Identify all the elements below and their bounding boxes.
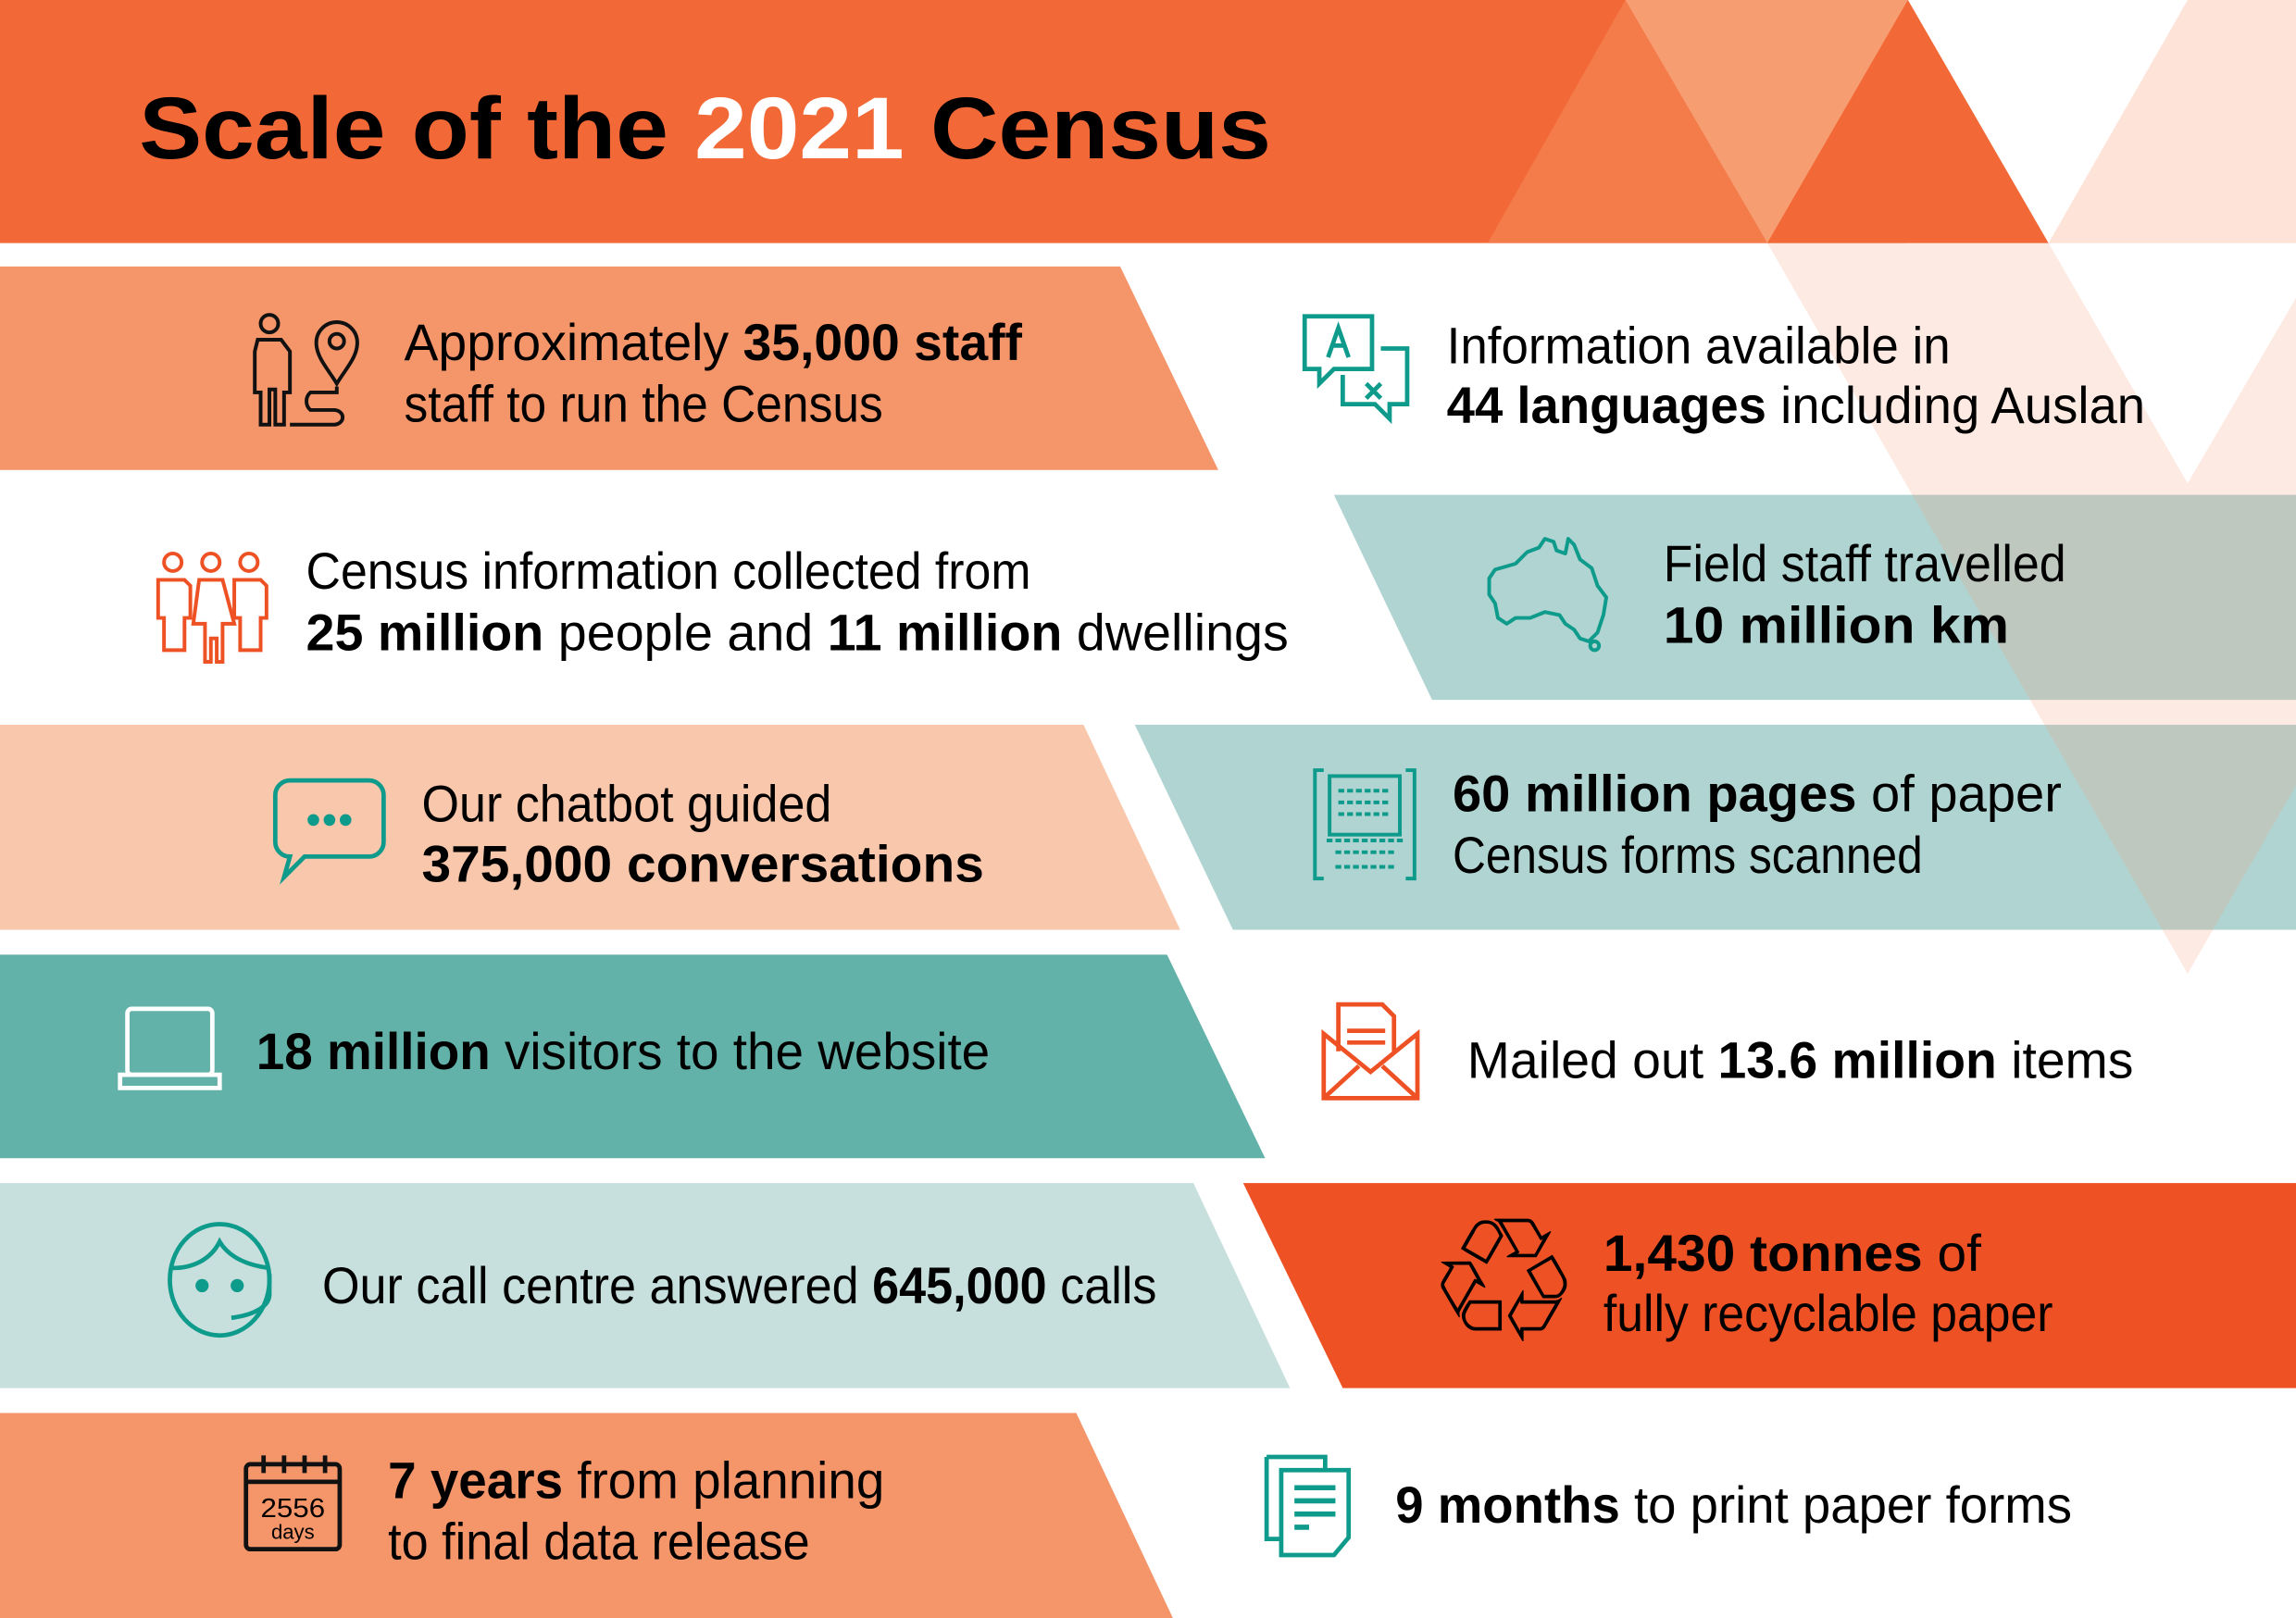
icon: Australia map bbox=[1490, 539, 1606, 650]
panel: call centre bbox=[169, 1224, 1156, 1336]
panel: people bbox=[158, 542, 1289, 662]
panel: recycling bbox=[1427, 1182, 2053, 1383]
text: printing: 9 months to print paper forms bbox=[1395, 1476, 2072, 1534]
text: mail: Mailed out 13.6 million items bbox=[1467, 1031, 2133, 1089]
icon: envelope bbox=[1324, 1004, 1417, 1098]
icon: calendar: 2556 bbox=[261, 1494, 325, 1524]
text: people: Census information collected from bbox=[306, 542, 1030, 600]
panel: people: 25 million people and 11 million dwellings bbox=[306, 604, 1289, 661]
icon: people group bbox=[158, 554, 267, 662]
panel: scanning bbox=[1315, 765, 2062, 884]
panel: staff bbox=[255, 314, 1023, 433]
text: chatbot: Our chatbot guided bbox=[422, 775, 831, 832]
panel: field staff bbox=[1490, 535, 2066, 653]
panel: staff: staff to run the Census bbox=[405, 376, 883, 433]
icon: documents bbox=[1267, 1457, 1349, 1555]
icon: translation bubbles bbox=[1304, 317, 1407, 418]
panel: planning bbox=[246, 1451, 884, 1571]
icon: headset face bbox=[169, 1224, 269, 1336]
panel: recycling: fully recyclable paper bbox=[1603, 1285, 2053, 1342]
text: staff: Approximately 35,000 staff bbox=[405, 314, 1023, 371]
text: planning: 7 years from planning bbox=[388, 1451, 884, 1509]
panel: languages bbox=[1304, 317, 2145, 434]
icon: chat bubble bbox=[275, 780, 383, 877]
icon: scanner bbox=[1315, 770, 1415, 878]
title: Scale of the 2021 Census bbox=[139, 80, 1271, 178]
text: languages: Information available in bbox=[1447, 317, 1951, 374]
icon: calendar bbox=[246, 1455, 340, 1550]
panel: languages: 44 languages including Auslan bbox=[1447, 377, 2145, 434]
icon: laptop bbox=[120, 1009, 219, 1088]
panel: field staff: 10 million km bbox=[1664, 596, 2009, 653]
text: recycling: 1,430 tonnes of bbox=[1603, 1225, 1982, 1282]
text: website: 18 million visitors to the website bbox=[256, 1023, 990, 1080]
panel: printing bbox=[1267, 1457, 2072, 1555]
text: field staff: Field staff travelled bbox=[1664, 535, 2066, 592]
panel: scanning: Census forms scanned bbox=[1453, 827, 1923, 884]
panel: chatbot bbox=[275, 775, 984, 892]
header banner bbox=[0, 0, 2296, 243]
icon: calendar: days bbox=[271, 1521, 315, 1544]
text: call centre: Our call centre answered 645,000 calls bbox=[322, 1257, 1156, 1314]
text: scanning: 60 million pages of paper bbox=[1453, 765, 2062, 822]
panel: mail bbox=[1324, 1004, 2133, 1098]
panel: chatbot: 375,000 conversations bbox=[422, 835, 984, 892]
icon: staff with location pin bbox=[255, 315, 357, 425]
panel: website bbox=[120, 1009, 990, 1088]
panel: planning: to final data release bbox=[388, 1513, 810, 1571]
icon: recycling symbol: ♲ bbox=[1427, 1182, 1581, 1383]
decorative pale triangle overlay bbox=[1767, 243, 2296, 974]
